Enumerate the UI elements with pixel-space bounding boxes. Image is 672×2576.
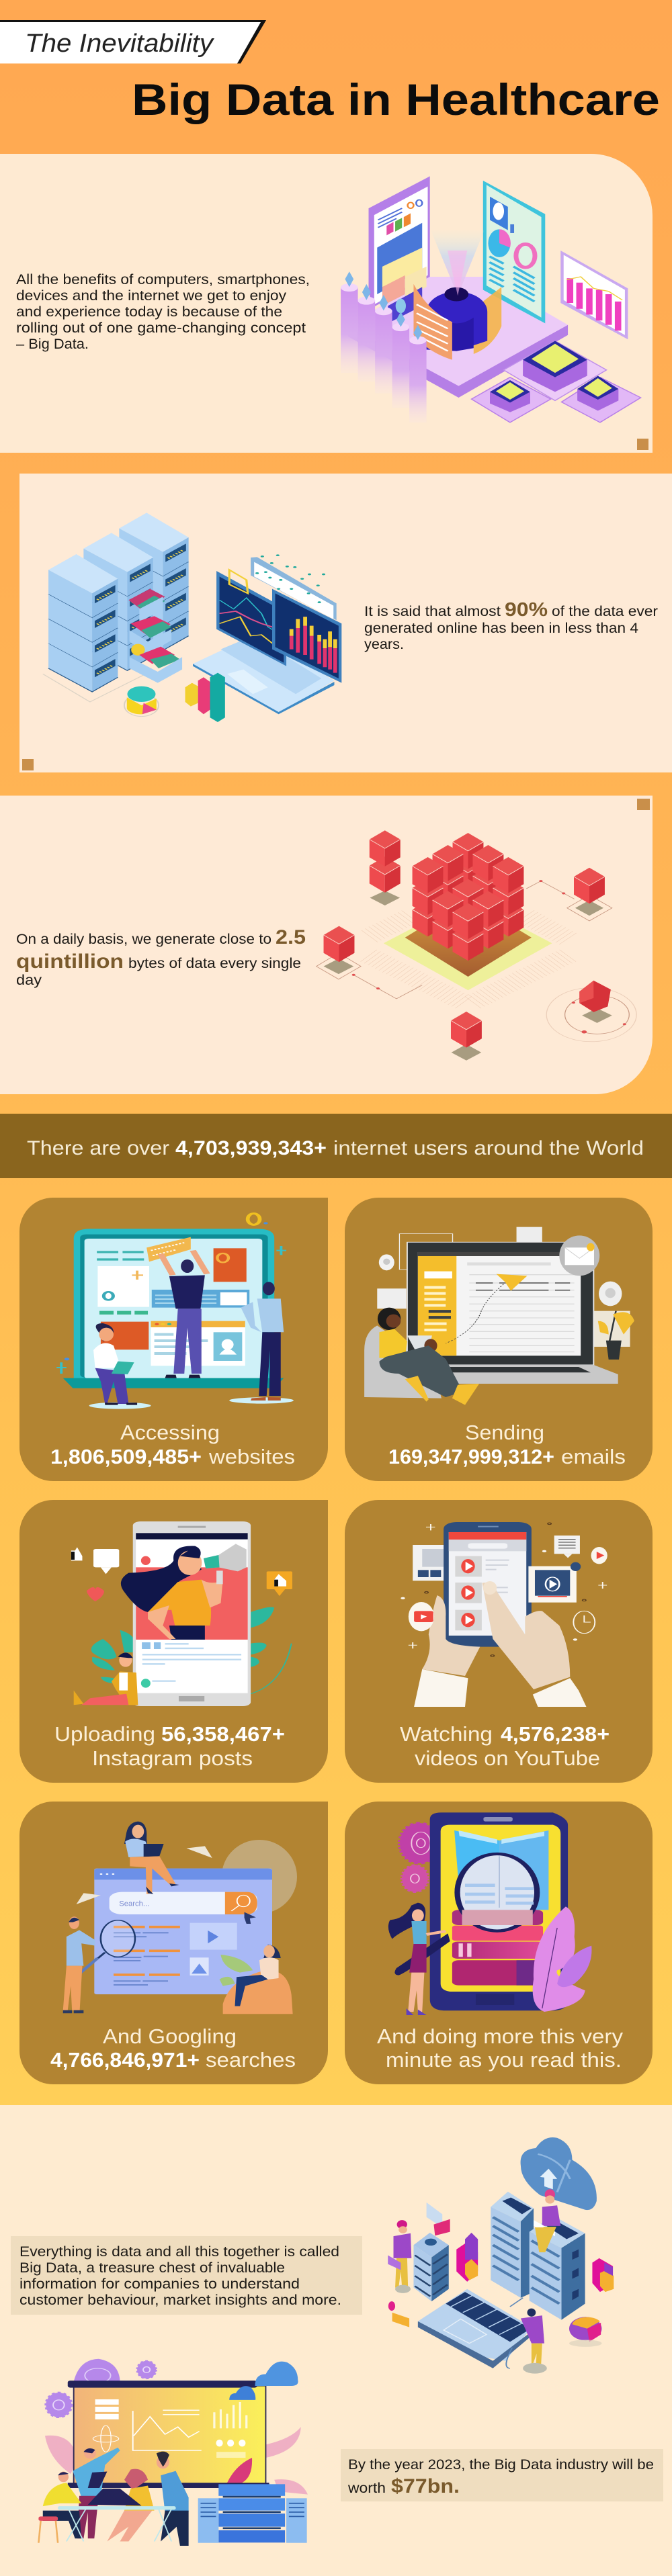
caption: searches [206,2048,296,2072]
caption: And doing more this very [377,2025,624,2048]
caption: videos on YouTube [415,1746,600,1770]
callout: everything is data: customer behaviour, market insights and more. [19,2293,341,2308]
text: benefits: and experience today is because of the [16,304,282,320]
caption [54,1722,285,1770]
text: benefits: All the benefits of computers, smartphones, [16,272,310,287]
band: internet users [0,1114,672,1178]
callout: everything is data: Everything is data and all this together is called [19,2244,339,2260]
text: 90 percent statement [364,599,658,652]
text: benefits: devices and the internet we get to enjoy [16,288,287,304]
caption: 1,806,509,485+ [50,1445,202,1468]
band: internet users: internet users around the World [333,1137,644,1159]
callout: industry worth: worth [347,2481,386,2496]
title: Big Data in Healthcare [132,75,660,124]
illustration: red data cube grid [317,830,636,1061]
caption [377,2025,624,2072]
illustration: woman sending email [364,1227,634,1405]
caption: Uploading [54,1722,155,1746]
text: daily data statement: day [16,973,42,988]
caption: Watching [400,1722,493,1746]
caption: 56,358,467+ [161,1722,285,1746]
illustration: team building a website [56,1214,294,1409]
illustration: servers and laptop [43,513,341,722]
text: benefits: rolling out of one game-changing concept [16,320,306,336]
caption: 169,347,999,312+ [388,1445,554,1468]
text: 90 percent statement: 90% [505,599,548,621]
marker square [22,759,34,770]
caption [50,2025,296,2072]
illustration: magnifier over book on phone [388,1812,591,2015]
illustration: isometric data platform [341,176,641,423]
card: emails [345,1198,653,1481]
ribbon: The Inevitability [0,20,266,63]
callout: everything is data [11,2236,362,2315]
callout: everything is data: Big Data, a treasure chest of invaluable [19,2260,285,2276]
card: doing more [345,1802,653,2084]
caption [388,1421,626,1468]
marker square [637,799,650,810]
text: benefits: – Big Data. [16,337,89,352]
callout: everything is data: information for companies to understand [19,2276,300,2292]
panel: 2.5 quintillion bytes [0,795,653,1094]
illustration: woman with megaphone on phone [71,1521,292,1706]
caption [50,1421,295,1468]
card: youtube videos [345,1500,653,1783]
illustration: browser search: Search... [119,1900,149,1908]
caption: 4,766,846,971+ [50,2048,200,2072]
text: 90 percent statement: It is said that almost [364,604,501,619]
illustration: hands holding phone [401,1522,607,1707]
text: daily data statement: On a daily basis, we generate close to [16,932,271,947]
text: daily data statement: 2.5 [276,926,306,948]
callout: industry worth: $77bn. [391,2475,460,2497]
ribbon: The Inevitability: The Inevitability [25,30,214,58]
caption: Accessing [120,1421,220,1444]
illustration: browser search [63,1822,297,2014]
text: 90 percent statement: years. [364,637,404,652]
caption: emails [561,1445,626,1468]
panel: closing section [0,2105,672,2576]
text: 90 percent statement: generated online has been in less than 4 [364,621,638,636]
text: daily data statement: bytes of data every single [128,956,301,971]
card: google searches [19,1802,328,2084]
caption: minute as you read this. [386,2048,622,2072]
caption: 4,576,238+ [501,1722,610,1746]
text: daily data statement: quintillion [16,950,124,973]
caption: websites [208,1445,295,1468]
text: benefits [16,272,310,352]
illustration: team at data board [38,2359,308,2546]
band: internet users: There are over [27,1137,169,1159]
marker square [637,439,648,450]
illustration: cloud servers and laptop [388,2137,614,2374]
band: internet users: 4,703,939,343+ [175,1137,327,1159]
text: 90 percent statement: of the data ever [552,604,658,619]
panel: 90 percent of data [19,474,672,772]
panel: intro benefits [0,154,653,453]
caption: And Googling [103,2025,237,2048]
card: instagram posts [19,1500,328,1783]
caption: Sending [465,1421,544,1444]
card: websites [19,1198,328,1481]
caption: Instagram posts [92,1746,253,1770]
callout: industry worth [341,2449,663,2501]
caption [400,1722,610,1770]
text: daily data statement [16,926,306,988]
callout: industry worth: By the year 2023, the Big Data industry will be [348,2457,654,2473]
